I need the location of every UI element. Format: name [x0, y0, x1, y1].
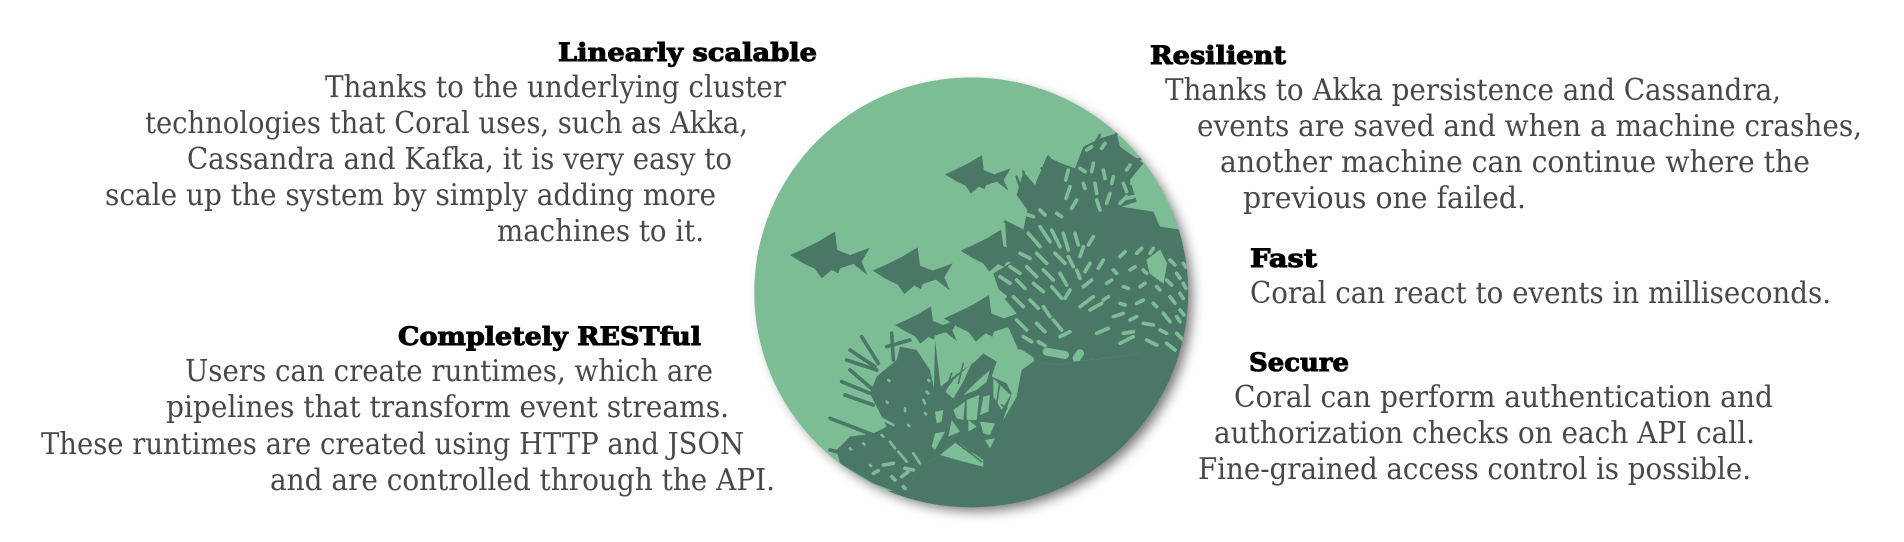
text: Linearly scalable description: scale up the system by simply adding more	[105, 178, 716, 213]
heading: Secure: Secure	[1249, 348, 1349, 377]
text: Completely RESTful description: These runtimes are created using HTTP and JSON	[41, 427, 744, 462]
text: Secure description: Coral can perform authentication and	[1234, 380, 1773, 415]
branching net	[933, 340, 1012, 467]
upper coral tree	[993, 133, 1190, 375]
text: Completely RESTful description: Users can create runtimes, which are	[185, 354, 713, 389]
coral twigs on outline	[1005, 133, 1143, 230]
text: Fast description: Coral can react to events in milliseconds.	[1250, 276, 1831, 311]
text: Resilient description: previous one failed.	[1243, 181, 1526, 216]
text: Completely RESTful description: and are controlled through the API.	[270, 463, 775, 498]
text: Linearly scalable description: Thanks to the underlying cluster	[325, 70, 786, 105]
extra flecks along lower coral	[1023, 263, 1186, 350]
text: Secure description: Fine-grained access control is possible.	[1198, 452, 1751, 487]
text: Linearly scalable description: Cassandra and Kafka, it is very easy to	[187, 142, 732, 177]
rock	[888, 354, 1172, 508]
light flecks	[850, 380, 929, 488]
text: Resilient description: another machine can continue where the	[1220, 145, 1810, 180]
left twigs	[830, 333, 910, 453]
block: Linearly scalable	[105, 38, 817, 249]
illustration: coral reef disc	[754, 77, 1207, 527]
text: Secure description	[1198, 380, 1773, 487]
disc scene	[754, 77, 1207, 527]
text: Completely RESTful description	[41, 354, 775, 498]
block: Completely RESTful	[41, 322, 775, 498]
block: Resilient	[1150, 41, 1862, 216]
text: Linearly scalable description	[105, 70, 786, 249]
text: Linearly scalable description: machines to it.	[497, 214, 704, 249]
text: Resilient description	[1165, 73, 1862, 216]
light flecks in coral	[993, 143, 1186, 360]
block: Secure	[1198, 348, 1773, 487]
lower coral	[830, 333, 1012, 493]
text: Completely RESTful description: pipelines that transform event streams.	[166, 390, 729, 425]
disc shadow	[762, 85, 1192, 511]
heading: Linearly scalable: Linearly scalable	[558, 38, 817, 67]
dark mass	[837, 347, 940, 493]
heading: Fast: Fast	[1250, 244, 1318, 273]
block: Fast	[1250, 244, 1831, 311]
net windows	[932, 363, 1011, 467]
heading: Completely RESTful: Completely RESTful	[398, 322, 701, 351]
fish school	[790, 155, 1033, 344]
text: Secure description: authorization checks on each API call.	[1214, 416, 1755, 451]
heading: Resilient: Resilient	[1150, 41, 1286, 70]
text: Resilient description: events are saved and when a machine crashes,	[1197, 109, 1862, 144]
text: Linearly scalable description: technologies that Coral uses, such as Akka,	[145, 106, 748, 141]
text: Resilient description: Thanks to Akka persistence and Cassandra,	[1165, 73, 1781, 108]
